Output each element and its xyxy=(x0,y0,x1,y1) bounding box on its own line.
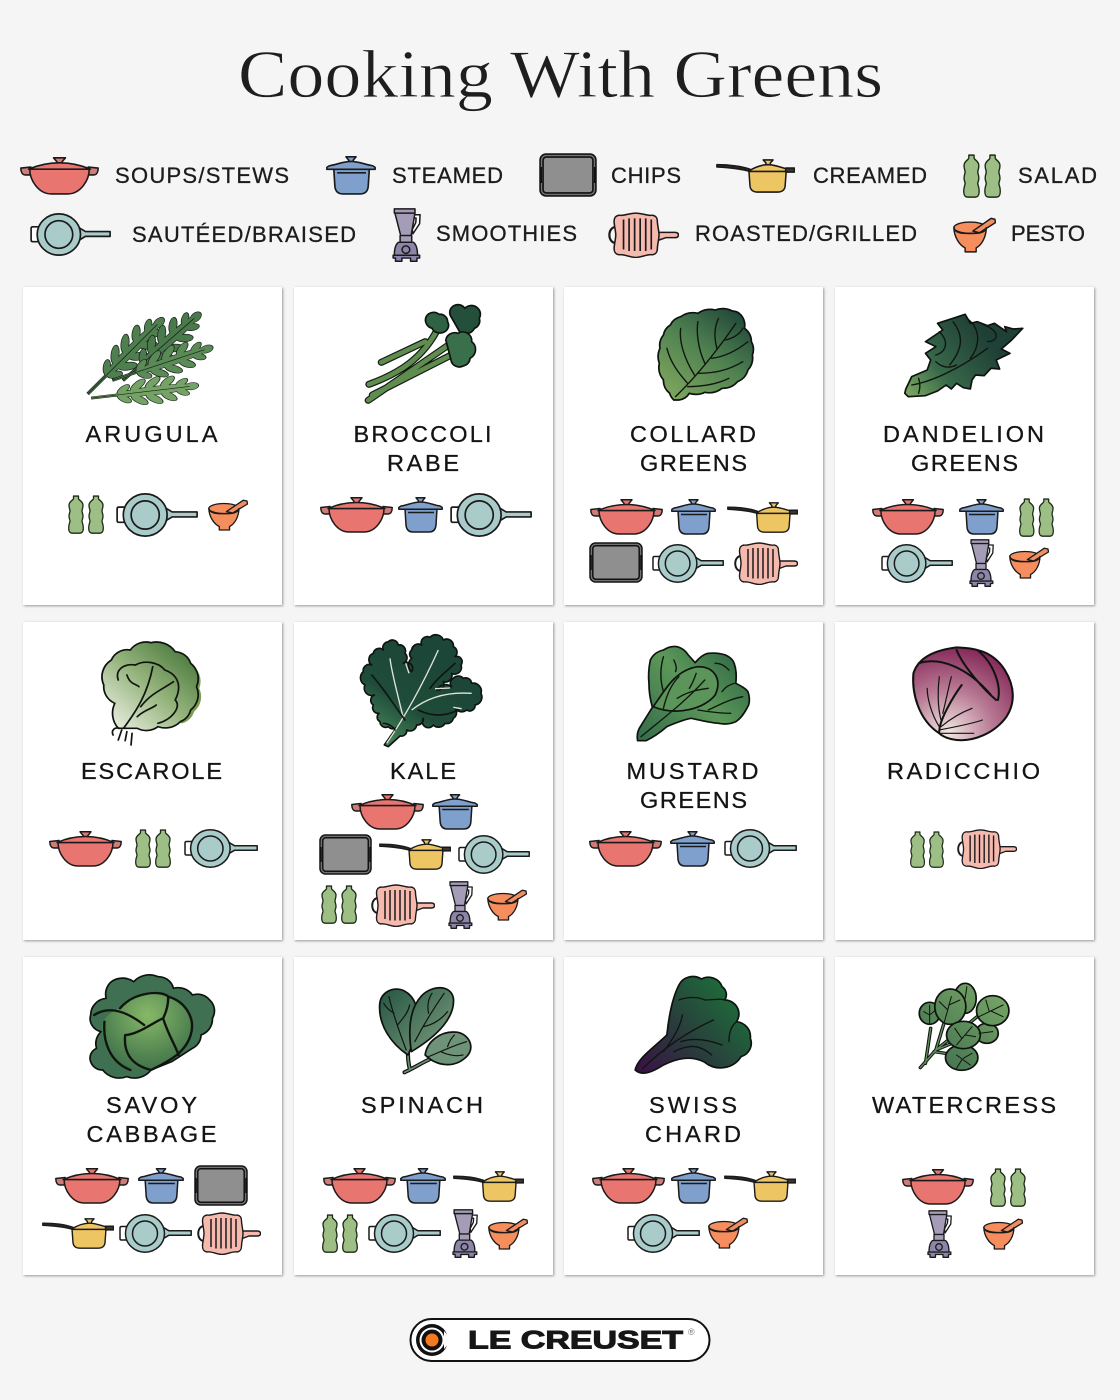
legend item: roasted/grilled: ROASTED/GRILLED xyxy=(695,221,917,246)
legend item: smoothies xyxy=(393,209,577,261)
icon: salad xyxy=(323,1215,357,1252)
legend xyxy=(21,154,1097,261)
illustration: swiss chard xyxy=(635,977,751,1073)
icon: sauteed xyxy=(369,1215,440,1252)
legend item: creamed: CREAMED xyxy=(813,163,927,188)
icon: steamed xyxy=(960,500,1003,534)
icon: soups xyxy=(903,1170,973,1204)
heading: savoy cabbage: SAVOY xyxy=(106,1092,197,1118)
panel: radicchio xyxy=(835,622,1094,940)
icon: sauteed xyxy=(628,1215,699,1252)
panel: watercress xyxy=(835,957,1094,1275)
illustration: broccoli rabe xyxy=(368,305,480,400)
icon: steamed xyxy=(139,1169,183,1203)
heading: savoy cabbage: CABBAGE xyxy=(86,1121,216,1147)
legend item: steamed xyxy=(327,157,503,194)
heading: dandelion greens: GREENS xyxy=(911,450,1018,476)
icon: roasted xyxy=(372,885,434,926)
heading: radicchio: RADICCHIO xyxy=(887,758,1040,784)
legend item: pesto: PESTO xyxy=(1011,221,1085,246)
icon: soups xyxy=(321,498,392,532)
illustration: spinach xyxy=(380,988,471,1072)
icon: creamed xyxy=(728,503,798,532)
heading: mustard greens: GREENS xyxy=(640,787,747,813)
legend item: roasted/grilled xyxy=(609,213,917,257)
icon: smoothies xyxy=(453,1210,477,1257)
legend item: sauteed/braised xyxy=(31,214,356,255)
heading: collard greens: GREENS xyxy=(640,450,747,476)
panel: swiss chard xyxy=(564,957,823,1275)
heading: escarole: ESCAROLE xyxy=(81,758,222,784)
icon: sauteed xyxy=(653,545,723,582)
icon: roasted xyxy=(198,1213,260,1254)
illustration: dandelion greens xyxy=(905,314,1023,397)
logo: Le Creuset xyxy=(410,1319,710,1361)
icon: steamed xyxy=(433,795,477,829)
icon: creamed xyxy=(725,1172,796,1201)
panel: escarole xyxy=(23,622,282,940)
icon: soups xyxy=(56,1169,128,1203)
heading: mustard greens: MUSTARD xyxy=(626,758,758,784)
heading: collard greens: COLLARD xyxy=(630,421,756,447)
icon: pesto xyxy=(209,500,247,530)
icon: salad xyxy=(322,886,356,923)
icon: creamed xyxy=(380,840,450,869)
icon: salad xyxy=(69,496,103,533)
heading: swiss chard: CHARD xyxy=(645,1121,741,1147)
icon: steamed xyxy=(672,1169,715,1203)
panel: kale xyxy=(294,622,553,940)
panel: arugula xyxy=(23,287,282,605)
legend item: salad xyxy=(964,155,1097,197)
legend item: smoothies: SMOOTHIES xyxy=(436,221,577,246)
heading: broccoli rabe: BROCCOLI xyxy=(354,421,492,447)
heading: swiss chard xyxy=(645,1092,741,1147)
legend item: soups/stews xyxy=(21,158,289,194)
icon: soups xyxy=(593,1169,664,1203)
heading: spinach: SPINACH xyxy=(361,1092,483,1118)
heading: dandelion greens: DANDELION xyxy=(883,421,1044,447)
legend item: pesto xyxy=(954,218,1085,252)
icon: steamed xyxy=(671,832,714,866)
icon: steamed xyxy=(399,498,442,532)
icon: soups xyxy=(873,500,943,534)
illustration: collard greens xyxy=(658,309,753,400)
title: Cooking With Greens xyxy=(238,36,883,112)
illustration: arugula xyxy=(76,300,218,413)
panel: savoy cabbage xyxy=(23,957,282,1275)
icon: soups xyxy=(591,500,662,534)
icon: pesto xyxy=(488,890,526,920)
icon: soups xyxy=(324,1169,395,1203)
heading: kale: KALE xyxy=(390,758,456,784)
logo: Le Creuset: ® xyxy=(688,1327,695,1337)
icon: roasted xyxy=(958,830,1017,869)
icon: smoothies xyxy=(449,882,472,928)
legend item: salad: SALAD xyxy=(1018,163,1097,188)
heading: swiss chard: SWISS xyxy=(649,1092,737,1118)
icon: creamed xyxy=(454,1172,524,1201)
panel: broccoli rabe xyxy=(294,287,553,605)
heading: broccoli rabe: RABE xyxy=(387,450,459,476)
legend item: soups/stews: SOUPS/STEWS xyxy=(115,163,289,188)
legend item: chips: CHIPS xyxy=(611,163,681,188)
heading: savoy cabbage xyxy=(86,1092,216,1147)
legend item: chips xyxy=(540,154,681,196)
icon: chips xyxy=(195,1166,247,1205)
heading: arugula: ARUGULA xyxy=(86,421,218,447)
icon: sauteed xyxy=(459,836,529,873)
illustration: watercress xyxy=(919,983,1009,1070)
legend item: sauteed/braised: SAUTÉED/BRAISED xyxy=(132,222,356,247)
heading: watercress: WATERCRESS xyxy=(872,1092,1056,1118)
illustration: radicchio xyxy=(913,647,1013,740)
heading: dandelion greens xyxy=(883,421,1044,476)
icon: chips xyxy=(320,835,371,874)
legend item: steamed: STEAMED xyxy=(392,163,503,188)
icon: smoothies xyxy=(970,540,993,586)
icon: salad xyxy=(911,832,943,867)
icon: salad xyxy=(136,830,170,867)
icon: creamed xyxy=(43,1219,113,1248)
logo: Le Creuset: LE CREUSET xyxy=(468,1326,683,1354)
icon: steamed xyxy=(401,1169,445,1203)
icon: sauteed xyxy=(120,1215,191,1252)
icon: roasted xyxy=(735,543,798,584)
panel: collard greens xyxy=(564,287,823,605)
icon: pesto xyxy=(1010,548,1048,578)
icon: sauteed xyxy=(117,494,197,536)
panel: spinach xyxy=(294,957,553,1275)
panel: mustard greens xyxy=(564,622,823,940)
icon: sauteed xyxy=(882,545,952,582)
icon: sauteed xyxy=(185,830,257,867)
icon: chips xyxy=(590,543,642,582)
icon: sauteed xyxy=(725,830,796,867)
icon: smoothies xyxy=(928,1211,951,1257)
icon: salad xyxy=(1020,499,1053,536)
icon: pesto xyxy=(709,1218,747,1248)
panel: dandelion greens xyxy=(835,287,1094,605)
icon: soups xyxy=(590,832,661,866)
illustration: savoy cabbage xyxy=(90,975,214,1078)
illustration: escarole xyxy=(102,642,201,745)
icon: steamed xyxy=(672,500,715,534)
heading: broccoli rabe xyxy=(354,421,492,476)
icon: salad xyxy=(991,1169,1025,1206)
icon: pesto xyxy=(984,1219,1022,1249)
legend item: creamed xyxy=(717,160,927,192)
icon: sauteed xyxy=(451,494,531,536)
icon: pesto xyxy=(489,1219,527,1249)
icon: soups xyxy=(50,832,121,866)
illustration: kale xyxy=(360,635,482,747)
icon: soups xyxy=(352,795,423,829)
heading: mustard greens xyxy=(626,758,758,813)
illustration: mustard greens xyxy=(637,646,749,741)
heading: collard greens xyxy=(630,421,756,476)
